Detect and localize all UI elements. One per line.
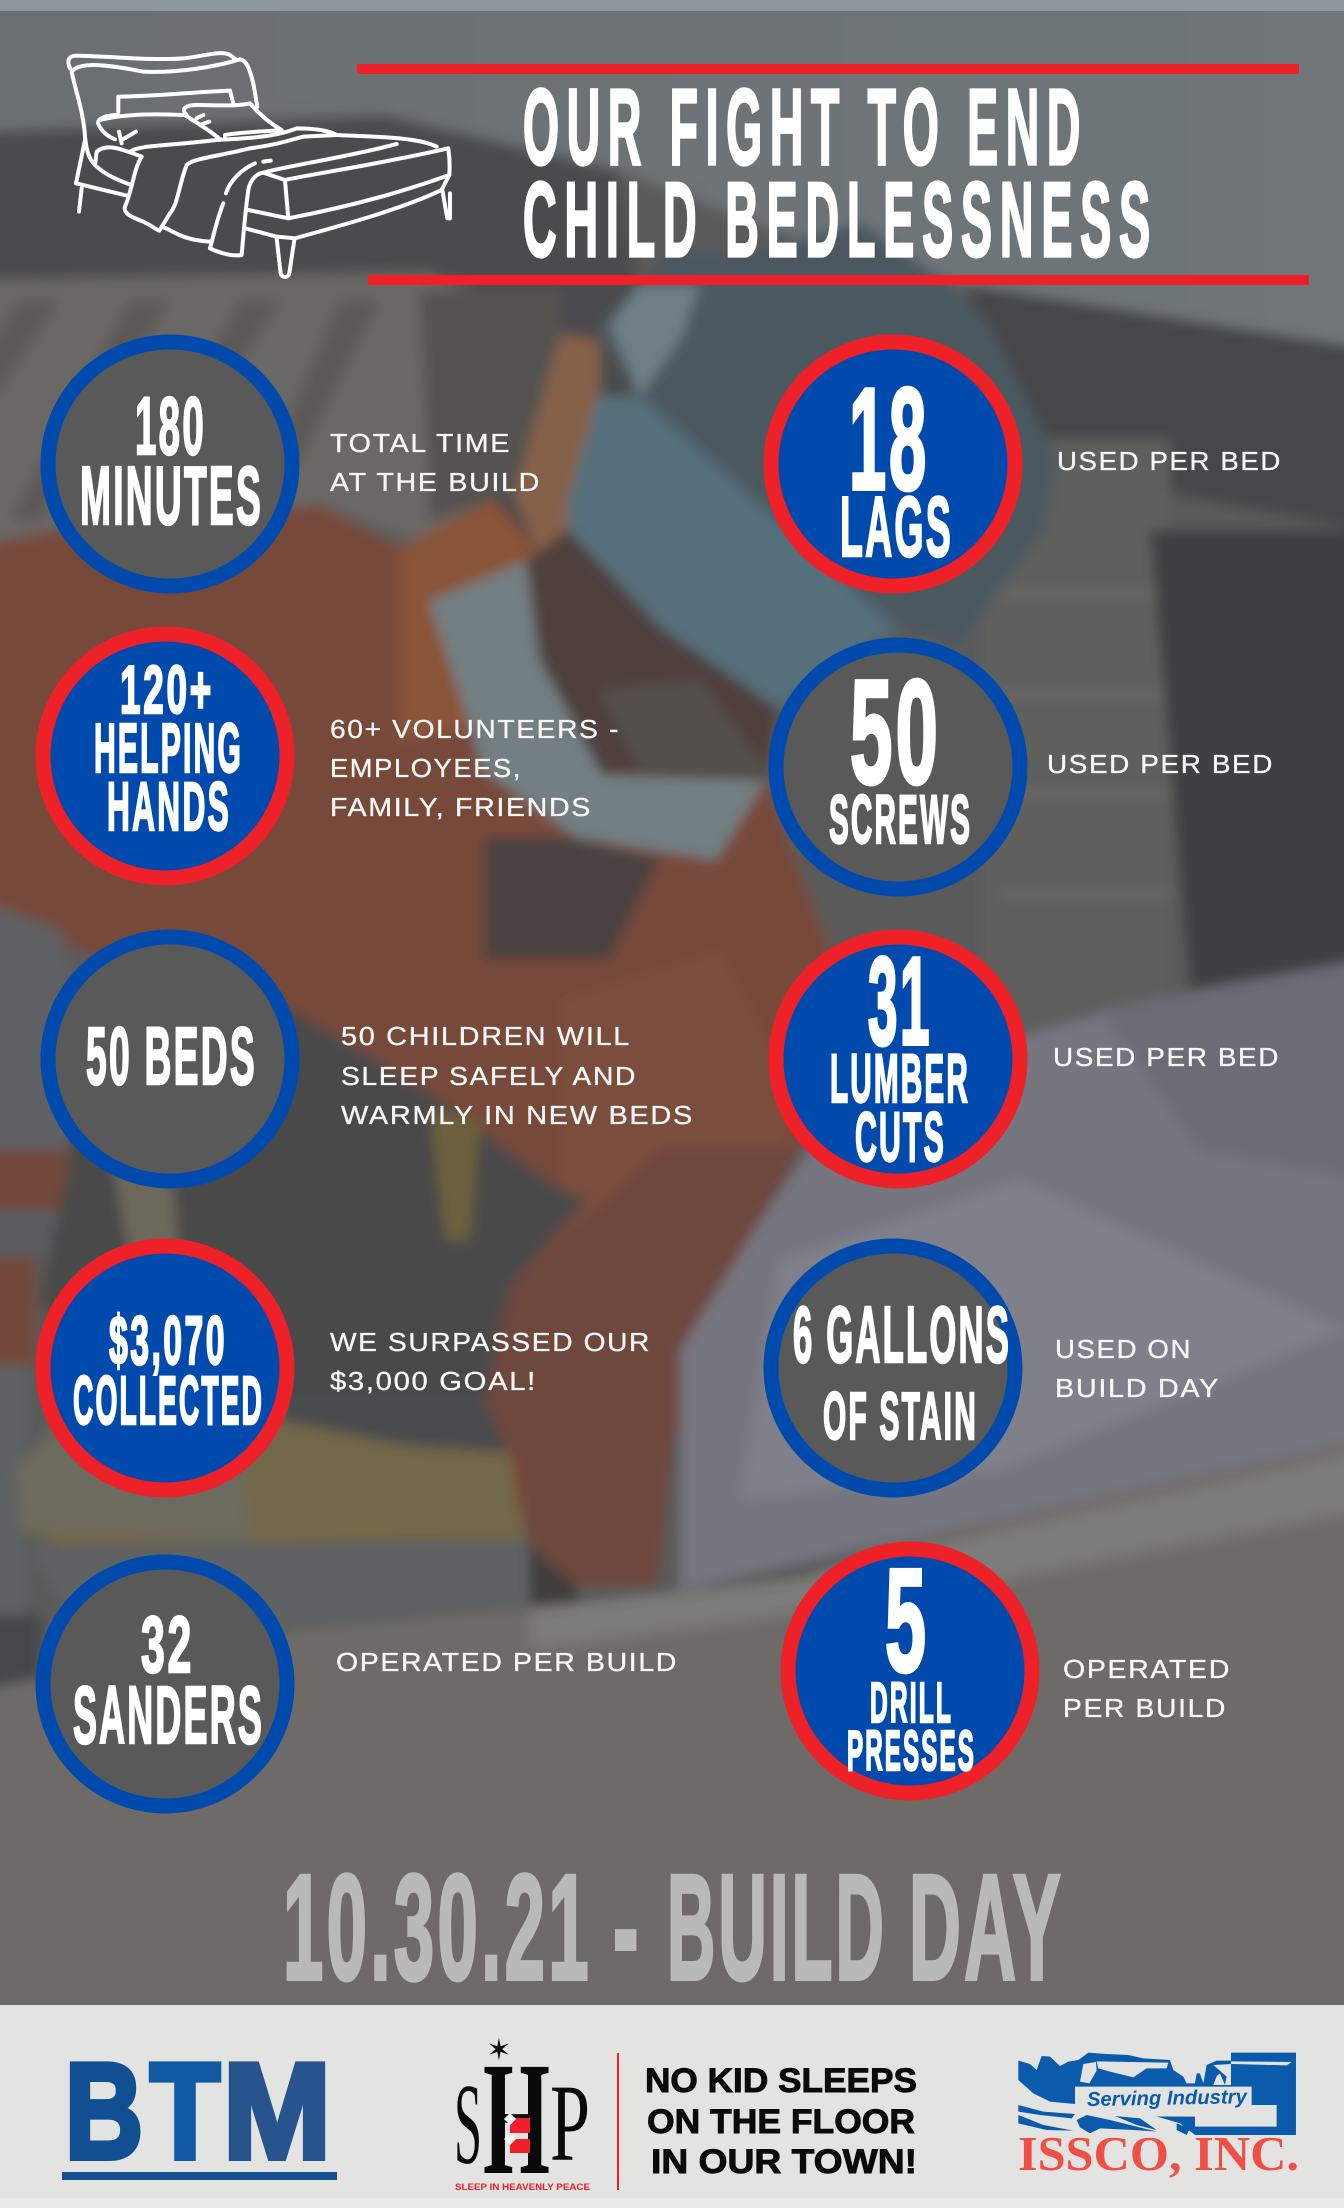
text: DAY (909, 1843, 1064, 2011)
stat circle: 5 drill presses (788, 1539, 1032, 1793)
label: operated per build (sanders): OPERATED PER BUILD (336, 1647, 678, 1677)
stat circle: 120+ helping hands: HELPING (94, 709, 243, 787)
logo: Sleep in Heavenly Peace (454, 2030, 590, 2208)
logo: ISSCO: ISSCO, INC. (1018, 2126, 1299, 2181)
stat circle: 120+ helping hands: HANDS (107, 768, 231, 845)
label: used per bed (lags): USED PER BED (1057, 446, 1282, 476)
logo: Sleep in Heavenly Peace: ✶ (486, 2033, 512, 2068)
slogan: ON THE FLOOR (647, 2103, 915, 2141)
stat circle: 50 screws: 50 (850, 650, 941, 815)
slogan (645, 2062, 917, 2181)
label: surpassed goal: $3,000 GOAL! (330, 1366, 537, 1396)
logo: Sleep in Heavenly Peace: H (483, 2030, 550, 2208)
label: volunteers (330, 714, 620, 822)
stat circle: 180 minutes (48, 342, 292, 586)
build day heading: - (613, 1843, 642, 2011)
stat circle: 50 screws (776, 645, 1020, 889)
stat circle: $3,070 collected: $3,070 (109, 1302, 227, 1379)
label: children: 50 CHILDREN WILL (341, 1021, 631, 1051)
stat circle: 18 lags: LAGS (840, 480, 953, 575)
text: COLLECTED (73, 1362, 264, 1439)
stat circle: 32 sanders (43, 1562, 287, 1806)
label: used on build day (1055, 1334, 1220, 1403)
logo: ISSCO: Serving Industry (1087, 2086, 1248, 2111)
title (523, 66, 1158, 279)
build day heading: 10.30.21 (283, 1843, 592, 2011)
stat circle: 50 screws: SCREWS (829, 781, 972, 858)
decorative title bar bottom (368, 275, 1309, 285)
stat circle: 31 lumber cuts (776, 933, 1020, 1181)
stat circle: 31 lumber cuts: CUTS (855, 1098, 946, 1176)
slogan: NO KID SLEEPS (645, 2062, 917, 2100)
label: used on build day: USED ON (1055, 1334, 1192, 1364)
decorative title bar top (357, 64, 1299, 74)
stat circle: 5 drill presses: DRILL (870, 1671, 953, 1735)
stat circle: 5 drill presses: PRESSES (847, 1719, 976, 1783)
stat circle: 6 gallons of stain: OF STAIN (823, 1379, 978, 1454)
stat circle: 6 gallons of stain (771, 1246, 1015, 1490)
stat circle: 180 minutes: MINUTES (80, 449, 263, 542)
label: used per bed (screws): USED PER BED (1047, 749, 1274, 779)
label: total time: AT THE BUILD (330, 467, 541, 497)
build day heading: BUILD (667, 1843, 887, 2011)
stat circle: 180 minutes: 180 (135, 381, 206, 472)
stat circle: 31 lumber cuts: LUMBER (830, 1040, 970, 1117)
divider line (617, 2053, 619, 2190)
stat circle: $3,070 collected (43, 1246, 287, 1490)
stat circle: 50 beds: 50 BEDS (86, 1011, 257, 1102)
label: surpassed goal (330, 1327, 651, 1396)
logo: BTM: B (65, 2035, 143, 2187)
label: total time: TOTAL TIME (330, 428, 511, 458)
label: volunteers: EMPLOYEES, (330, 753, 522, 783)
logo: BTM: M (223, 2035, 331, 2187)
stat circle: 120+ helping hands: 120+ (120, 652, 214, 728)
icon: bed line drawing (68, 53, 450, 277)
logo: Sleep in Heavenly Peace: S (454, 2061, 482, 2189)
label: operated per build (drill presses): PER BUILD (1063, 1693, 1227, 1723)
text: SANDERS (73, 1670, 264, 1761)
label: surpassed goal: WE SURPASSED OUR (330, 1327, 651, 1357)
panel: sponsor footer (0, 2005, 1344, 2208)
stat circle: 32 sanders: 32 (141, 1600, 194, 1689)
label: volunteers: 60+ VOLUNTEERS - (330, 714, 620, 744)
label: used on build day: BUILD DAY (1055, 1373, 1220, 1403)
label: total time (330, 428, 541, 497)
stat circle: 18 lags: 18 (849, 358, 929, 520)
label: volunteers: FAMILY, FRIENDS (330, 792, 592, 822)
label: children: WARMLY IN NEW BEDS (341, 1100, 694, 1130)
text: 6 GALLONS (793, 1290, 1011, 1379)
label: operated per build (drill presses): OPERATED (1063, 1654, 1231, 1684)
stat circle: 18 lags (771, 342, 1015, 586)
logo: Sleep in Heavenly Peace: SLEEP IN HEAVENLY PEACE (455, 2182, 590, 2193)
logo: Sleep in Heavenly Peace: P (550, 2062, 590, 2184)
stat circle: 120+ helping hands (43, 634, 287, 878)
logo: BTM: T (150, 2035, 220, 2187)
stat circle: 5 drill presses: 5 (885, 1539, 929, 1703)
label: operated per build (drill presses) (1063, 1654, 1231, 1723)
label: children: SLEEP SAFELY AND (341, 1061, 637, 1091)
label: used per bed (lumber): USED PER BED (1053, 1042, 1280, 1072)
logo: ISSCO (1018, 2053, 1299, 2181)
stat circle: 50 beds (48, 937, 292, 1181)
stat circle: 31 lumber cuts: 31 (868, 933, 932, 1071)
logo: BTM (62, 2035, 337, 2187)
slogan: IN OUR TOWN! (651, 2143, 917, 2181)
label: children (341, 1021, 694, 1130)
